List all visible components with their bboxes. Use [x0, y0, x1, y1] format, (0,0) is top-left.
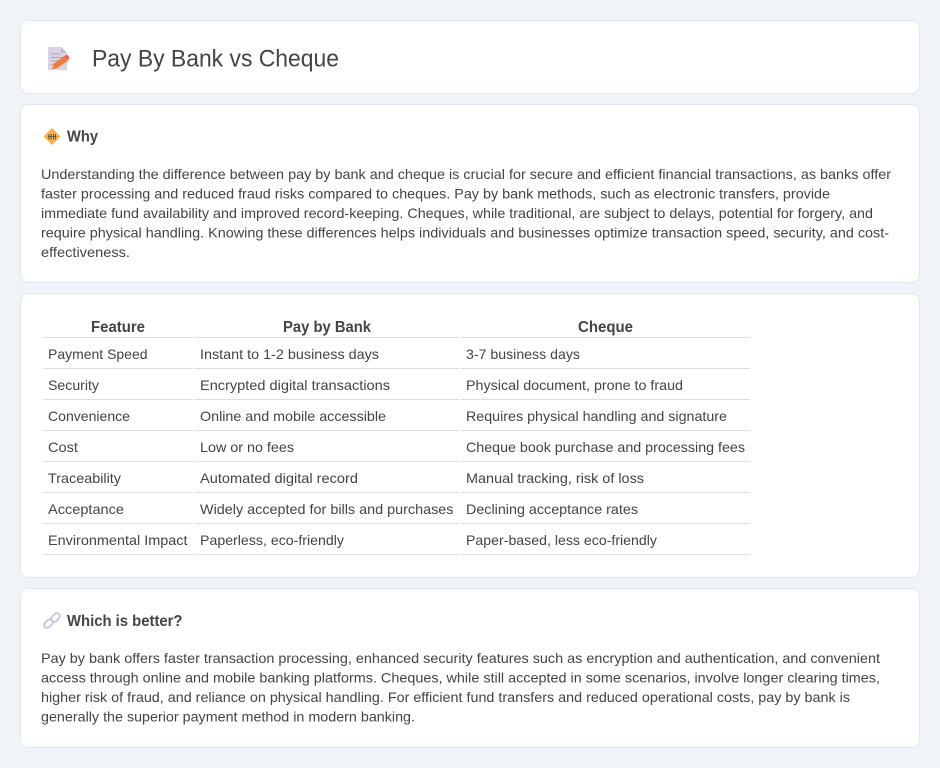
row: cost	[48, 439, 745, 455]
heading: why: Why	[67, 128, 98, 146]
row: environmental impact: Paper-based, less eco-friendly	[466, 532, 657, 548]
row: traceability	[48, 470, 644, 486]
row: security	[48, 377, 683, 393]
text block: why: immediate fund availability and improved record-keeping. Cheques, while traditional, are subject to delays, potential for forgery, and	[41, 205, 873, 221]
text block: why: Understanding the difference between pay by bank and cheque is crucial for secure and efficient financial transactions, as banks offer	[41, 166, 891, 182]
icon: document with pencil	[48, 47, 70, 70]
row: security: Encrypted digital transactions	[200, 377, 390, 393]
row: security: Security	[48, 377, 99, 393]
row: convenience: Convenience	[48, 408, 130, 424]
text block: why	[41, 166, 891, 260]
row: acceptance: Declining acceptance rates	[466, 501, 638, 517]
row: traceability: Automated digital record	[200, 470, 358, 486]
panel: comparison table	[20, 294, 920, 578]
row: cost: Low or no fees	[200, 439, 294, 455]
panel: which is better	[20, 588, 920, 748]
table header: Pay by Bank	[283, 319, 371, 336]
icon: warning diamond	[44, 128, 60, 145]
row: environmental impact: Paperless, eco-friendly	[200, 532, 344, 548]
row: payment speed: 3-7 business days	[466, 346, 580, 362]
text block: which is better: higher risk of fraud, and reliance on physical handling. For efficient fund transfers and reduced operational costs, pay by bank is	[41, 689, 850, 705]
row: payment speed: Instant to 1-2 business days	[200, 346, 379, 362]
row: environmental impact: Environmental Impact	[48, 532, 188, 548]
text block: which is better: generally the superior payment method in modern banking.	[41, 708, 415, 724]
row: environmental impact	[48, 532, 657, 548]
text block: why: require physical handling. Knowing these differences helps individuals and businesses optimize transaction speed, security, and cost-	[41, 224, 889, 240]
table header: Cheque	[578, 319, 633, 336]
row: convenience	[48, 408, 727, 424]
title: Pay By Bank vs Cheque	[92, 46, 339, 72]
row: cost: Cheque book purchase and processing fees	[466, 439, 745, 455]
row: payment speed	[48, 346, 580, 362]
text block: which is better: Pay by bank offers faster transaction processing, enhanced security features such as encryption and authentication, and convenient	[41, 650, 880, 666]
table rules	[43, 338, 750, 554]
panel: header	[20, 20, 920, 94]
row: acceptance: Widely accepted for bills and purchases	[200, 501, 454, 517]
text block: why: faster processing and reduced fraud risks compared to cheques. Pay by bank methods, such as electronic transfers, provide	[41, 186, 830, 202]
icon: chain link	[43, 612, 61, 629]
table header	[91, 319, 633, 336]
row: security: Physical document, prone to fraud	[466, 377, 683, 393]
text block: which is better: access through online and mobile banking platforms. Cheques, while still accepted in some scenarios, involve longer clearing times,	[41, 670, 880, 686]
row: acceptance	[48, 501, 638, 517]
table header: Feature	[91, 319, 145, 336]
row: traceability: Traceability	[48, 470, 121, 486]
row: payment speed: Payment Speed	[48, 346, 148, 362]
panel: why	[20, 104, 920, 282]
text block: why: effectiveness.	[41, 244, 130, 260]
row: convenience: Requires physical handling and signature	[466, 408, 727, 424]
row: convenience: Online and mobile accessible	[200, 408, 386, 424]
text block: which is better	[41, 650, 880, 724]
row: acceptance: Acceptance	[48, 501, 124, 517]
row: traceability: Manual tracking, risk of loss	[466, 470, 644, 486]
heading: which is better: Which is better?	[67, 613, 182, 630]
row: cost: Cost	[48, 439, 78, 455]
